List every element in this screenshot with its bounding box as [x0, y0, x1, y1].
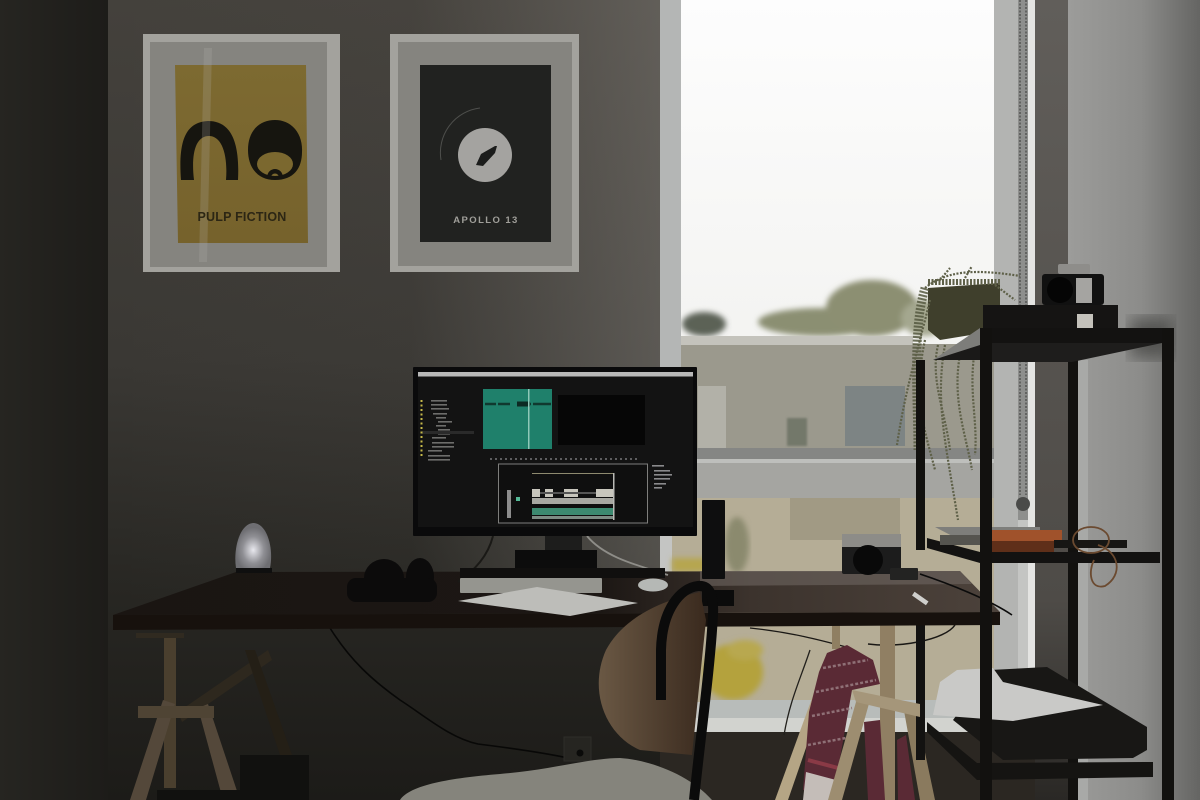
- plant: [897, 266, 1020, 520]
- top camera: [1042, 264, 1104, 305]
- chair wood back: [599, 592, 706, 755]
- chair tube: [661, 586, 713, 800]
- desk top: [113, 571, 1000, 630]
- poster: Pulp Fiction: [143, 34, 340, 272]
- trestle right front beam and leg: [828, 690, 920, 800]
- right wall: [1068, 0, 1200, 800]
- wall background: [0, 0, 660, 800]
- shelving unit: [916, 264, 1174, 800]
- window sill: [703, 700, 993, 718]
- neighbouring building: [681, 344, 994, 448]
- headphones: [347, 558, 437, 602]
- cable under desk: [330, 628, 568, 758]
- blind chain: [1016, 0, 1030, 511]
- vintage camera on desk: [842, 534, 901, 575]
- small device on desk: [890, 568, 918, 580]
- coiled cable: [1073, 527, 1117, 587]
- bezel: [413, 367, 697, 536]
- stand: [545, 536, 582, 551]
- middle shelf: [927, 538, 1160, 563]
- transport controls: [490, 458, 640, 460]
- pen on desk: [912, 592, 929, 605]
- shelf uprights rear: [916, 360, 1078, 800]
- monitor: [413, 367, 697, 582]
- keffiyeh towel: [803, 645, 915, 800]
- dark box under desk: [157, 755, 309, 800]
- right panel: [652, 465, 672, 489]
- window: [660, 0, 1035, 735]
- project files: [422, 400, 474, 461]
- poster hair shapes: [180, 120, 302, 180]
- papers: [458, 587, 638, 616]
- poster title: PULP FICTION: [198, 210, 286, 224]
- chair: [400, 586, 713, 800]
- top shelf: [933, 328, 1174, 362]
- bottom shelf: [927, 722, 1153, 780]
- shelf uprights front: [980, 328, 1174, 800]
- salt lamp: [235, 523, 272, 573]
- chair towel: [400, 758, 712, 800]
- trestle right and cables: [750, 625, 955, 800]
- printer and paper: [933, 667, 1147, 760]
- desk cable: [920, 574, 1012, 615]
- wall socket: [564, 737, 591, 761]
- poster title: APOLLO 13: [453, 215, 519, 226]
- wall column beside window: [1035, 0, 1068, 800]
- file tree folder icons: [420, 400, 422, 457]
- timeline: [498, 464, 648, 523]
- distant trees: [682, 280, 949, 336]
- lower pane: [672, 498, 994, 702]
- mouse: [638, 578, 668, 592]
- window frame sash: [660, 0, 681, 368]
- white plug: [1077, 314, 1093, 328]
- monitor cables: [458, 536, 493, 582]
- floor area beneath window: [660, 732, 1035, 800]
- trestle left: [130, 633, 292, 800]
- phone on desk: [702, 590, 734, 606]
- keyboard: [460, 578, 602, 593]
- books on middle shelf: [935, 527, 1127, 552]
- speaker: [702, 500, 725, 579]
- yellow bush: [672, 558, 763, 700]
- box on top shelf: [983, 305, 1118, 328]
- glass reflection: [199, 48, 212, 262]
- waveform panel: [483, 389, 552, 449]
- poster: Apollo 13: [390, 34, 579, 272]
